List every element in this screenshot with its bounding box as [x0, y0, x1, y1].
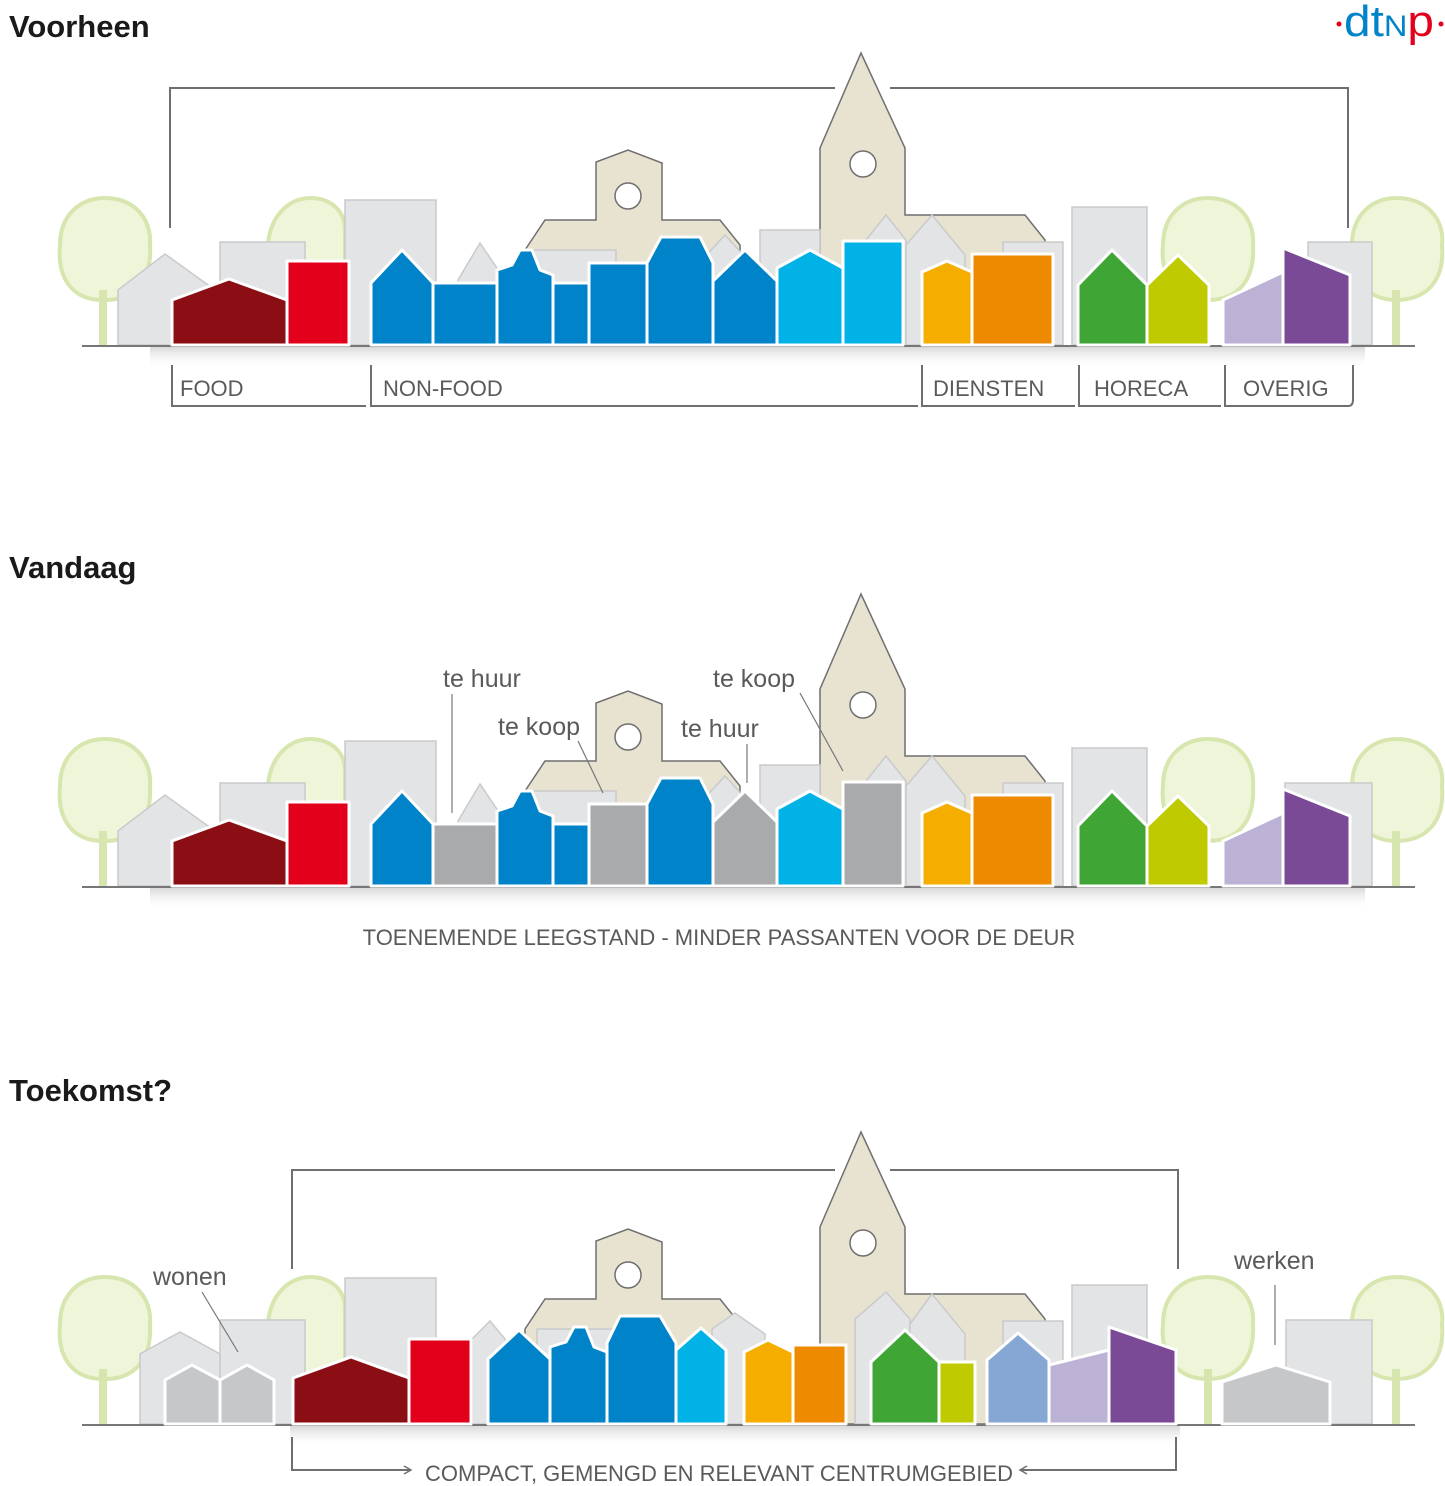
- scene: voorheen: [60, 53, 1442, 406]
- callout: wonen: [152, 1263, 238, 1352]
- bottom bracket & caption: COMPACT, GEMENGD EN RELEVANT CENTRUMGEBIED: [425, 1461, 1013, 1486]
- heading: Vandaag: Vandaag: [9, 550, 136, 585]
- category labels: FOOD: [180, 376, 244, 401]
- callout: werken: [1233, 1247, 1315, 1345]
- bottom bracket & caption: [292, 1437, 1176, 1486]
- church: [525, 1132, 1045, 1424]
- caption: TOENEMENDE LEEGSTAND - MINDER PASSANTEN VOOR DE DEUR: [363, 925, 1075, 950]
- trees: [60, 1277, 1442, 1424]
- trees: [60, 739, 1442, 886]
- category labels: DIENSTEN: [933, 376, 1044, 401]
- background buildings: [118, 200, 1372, 345]
- shops: [172, 237, 1350, 345]
- bracket top: [170, 88, 1348, 228]
- callouts: te huur / te koop: te huur: [681, 715, 759, 743]
- callouts: te huur / te koop: te koop: [713, 665, 795, 693]
- bracket top: [292, 1170, 1178, 1269]
- church: [525, 53, 1045, 345]
- category labels: OVERIG: [1243, 376, 1329, 401]
- callout: wonen: wonen: [152, 1263, 227, 1291]
- callouts: te huur / te koop: [443, 665, 843, 813]
- background buildings: [140, 1278, 1372, 1424]
- trees: [60, 198, 1442, 345]
- shops with vacancy: [172, 778, 1350, 886]
- background buildings: [118, 741, 1372, 886]
- category labels: HORECA: [1094, 376, 1188, 401]
- church: [525, 594, 1045, 886]
- category labels: [172, 365, 1353, 406]
- scene: toekomst: [60, 1132, 1442, 1486]
- shops compact: [293, 1316, 1176, 1424]
- scene: vandaag: [60, 594, 1442, 950]
- callout: werken: werken: [1233, 1247, 1315, 1275]
- callouts: te huur / te koop: te huur: [443, 665, 521, 693]
- category labels: NON-FOOD: [383, 376, 503, 401]
- heading: Voorheen: Voorheen: [9, 9, 150, 44]
- callouts: te huur / te koop: te koop: [498, 713, 580, 741]
- wonen houses: [165, 1365, 1330, 1424]
- heading: Toekomst?: Toekomst?: [9, 1073, 172, 1108]
